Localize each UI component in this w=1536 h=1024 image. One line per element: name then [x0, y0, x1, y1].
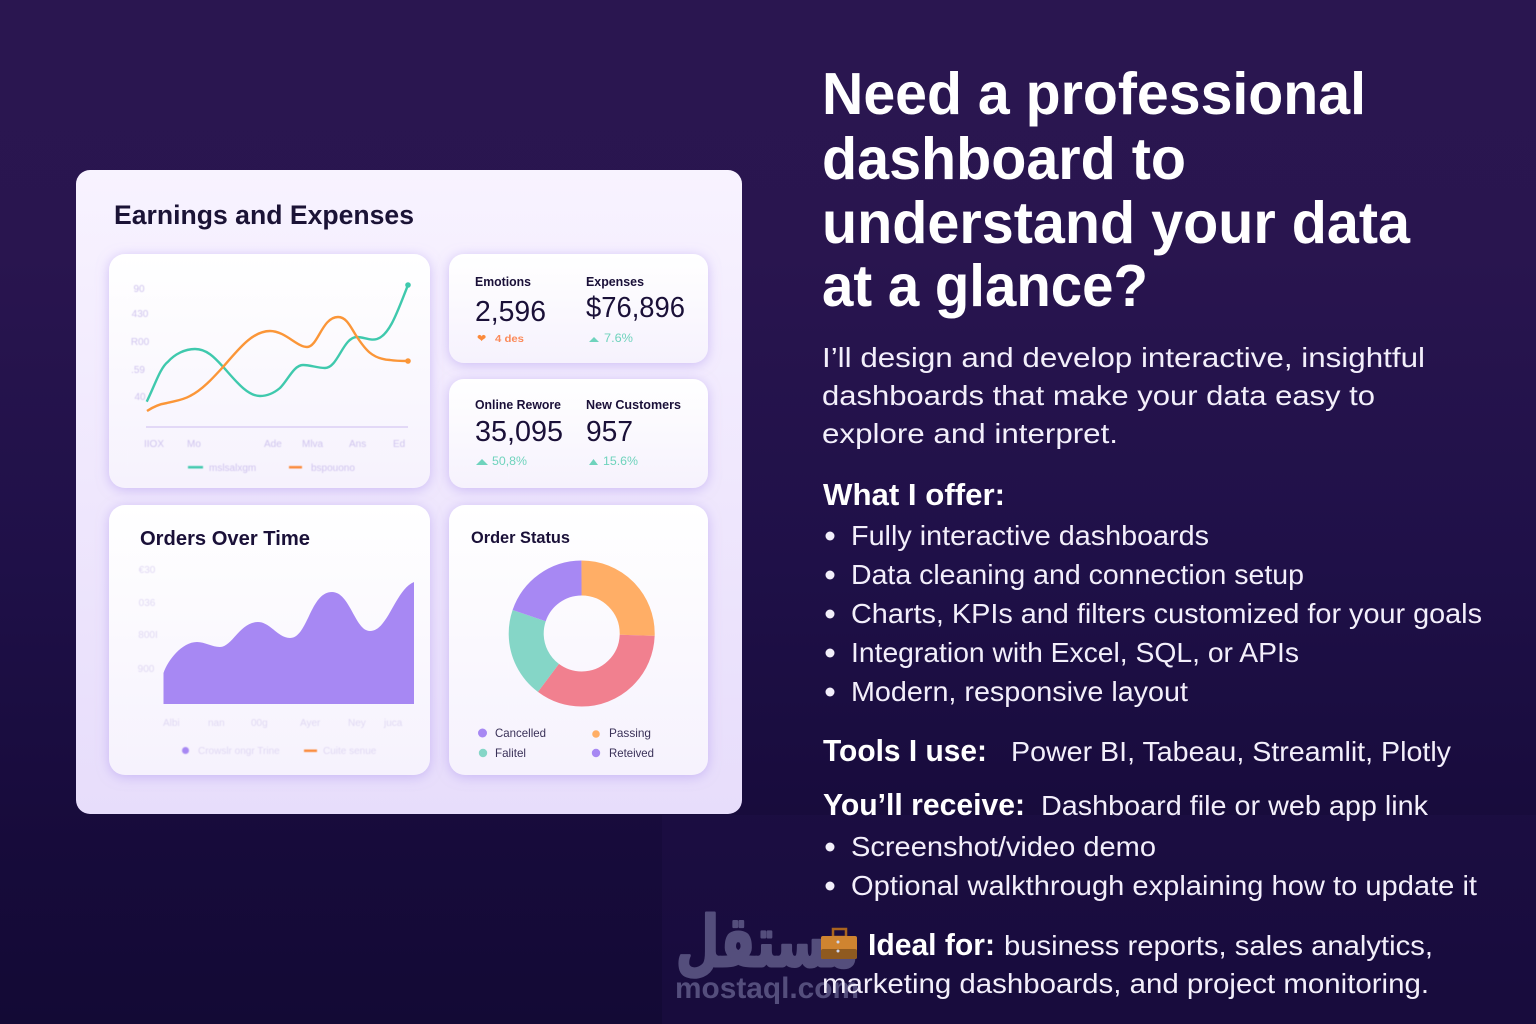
- y axis labels: 90: [133, 284, 145, 295]
- KPI new customers: [586, 398, 681, 468]
- intro paragraph: I’ll design and develop interactive, insightful: [822, 342, 1425, 373]
- KPI emotions: Emotions: [475, 275, 531, 289]
- x axis labels: Ayer: [300, 718, 321, 729]
- ideal for text: business reports, sales analytics,: [1004, 930, 1433, 961]
- watermark: mostaql logo: mostaql.com: [675, 972, 859, 1005]
- heading: what I offer: What I offer:: [823, 477, 1005, 512]
- KPI expenses: 7.6%: [604, 331, 633, 345]
- intro paragraph: explore and interpret.: [822, 418, 1118, 449]
- series: green line: [147, 285, 408, 402]
- legend: Reteived: [609, 746, 654, 760]
- legend: [182, 746, 377, 757]
- y axis labels: R00: [131, 337, 150, 348]
- tools line: Tools I use:: [823, 733, 987, 768]
- offer list: Fully interactive dashboards: [851, 520, 1209, 551]
- x axis labels: Mlva: [302, 439, 324, 450]
- watermark: mostaql logo: مستقل: [676, 903, 858, 981]
- KPI emotions: ❤: [477, 333, 486, 345]
- series: orange line: [147, 317, 408, 411]
- watermark: mostaql logo: [675, 903, 859, 1005]
- icon: briefcase: [821, 929, 857, 959]
- line end dots: [405, 282, 411, 364]
- y axis labels: €30: [139, 565, 156, 576]
- x axis labels: juca: [383, 718, 403, 729]
- offer list: Integration with Excel, SQL, or APIs: [851, 637, 1299, 668]
- axis line: [146, 426, 408, 428]
- receive list: Screenshot/video demo: [851, 831, 1156, 862]
- KPI new customers: 15.6%: [603, 454, 638, 468]
- legend: Falitel: [495, 746, 526, 760]
- KPI emotions: 4 des: [495, 334, 524, 345]
- title: at a glance?: [822, 253, 1148, 319]
- x axis labels: 00g: [251, 718, 268, 729]
- area chart: [164, 582, 414, 704]
- receive line: Dashboard file or web app link: [1041, 790, 1429, 821]
- panel: KPI top: [449, 254, 708, 363]
- y axis labels: [138, 565, 158, 675]
- dashboard heading: Earnings and Expenses: [114, 200, 414, 230]
- panel: orders over time: [109, 505, 430, 775]
- offer list: Data cleaning and connection setup: [851, 559, 1304, 590]
- title: Need a professional: [822, 61, 1366, 127]
- x axis labels: Albi: [163, 718, 180, 729]
- KPI new customers: 957: [586, 416, 633, 448]
- legend: bspouono: [311, 463, 355, 474]
- legend: [188, 463, 355, 474]
- KPI new customers: New Customers: [586, 398, 681, 412]
- intro paragraph: dashboards that make your data easy to: [822, 380, 1375, 411]
- x axis labels: Ney: [348, 718, 366, 729]
- legend: [478, 726, 654, 760]
- KPI expenses: Expenses: [586, 275, 644, 289]
- y axis labels: 800I: [138, 630, 158, 641]
- KPI online: 50,8%: [492, 454, 527, 468]
- panel: line chart: [109, 254, 430, 488]
- y axis labels: 036: [139, 598, 156, 609]
- x axis labels: [163, 718, 403, 729]
- x axis labels: Ans: [349, 439, 366, 450]
- KPI emotions: [475, 275, 546, 345]
- x axis labels: Mo: [187, 439, 201, 450]
- title: dashboard to: [822, 126, 1186, 192]
- offer list: [826, 520, 1482, 707]
- x axis labels: Ade: [264, 439, 282, 450]
- receive list: Optional walkthrough explaining how to update it: [851, 870, 1477, 901]
- ideal for text: marketing dashboards, and project monitoring.: [822, 968, 1429, 999]
- receive line: [823, 787, 1429, 822]
- KPI expenses: [586, 275, 685, 345]
- KPI emotions: 2,596: [475, 296, 546, 328]
- lower backdrop block: [662, 815, 1536, 1024]
- title: understand your data: [822, 190, 1411, 256]
- tools line: [823, 733, 1451, 768]
- title: [822, 61, 1411, 319]
- chart heading: Order Status: [471, 529, 570, 547]
- panel: order status: [449, 505, 708, 775]
- KPI online: Online Rewore: [475, 398, 561, 412]
- legend: Cuite senue: [323, 746, 377, 757]
- x axis labels: Ed: [393, 439, 405, 450]
- KPI online: 35,095: [475, 416, 563, 448]
- intro paragraph: [822, 342, 1425, 449]
- x axis labels: IIOX: [144, 439, 164, 450]
- offer list: Modern, responsive layout: [851, 676, 1188, 707]
- y axis labels: 900: [138, 664, 155, 675]
- legend: mslsalxgm: [209, 463, 256, 474]
- y axis labels: 430: [132, 309, 149, 320]
- offer list: Charts, KPIs and filters customized for your goals: [851, 598, 1482, 629]
- donut chart: [526, 578, 637, 689]
- x axis labels: nan: [208, 718, 225, 729]
- y axis labels: .59: [131, 365, 145, 376]
- panel: KPI bottom: [449, 379, 708, 488]
- KPI expenses: $76,896: [586, 292, 685, 324]
- legend: Cancelled: [495, 726, 546, 740]
- ideal for text: Ideal for:: [868, 927, 995, 962]
- KPI online: [475, 398, 563, 468]
- x axis labels: [144, 439, 405, 450]
- receive list: [826, 831, 1477, 901]
- legend: Passing: [609, 726, 651, 740]
- y axis labels: 40: [134, 392, 146, 403]
- y axis labels: [131, 284, 150, 403]
- receive line: You’ll receive:: [823, 787, 1025, 822]
- dashboard panel: [76, 170, 742, 814]
- ideal for text: [822, 927, 1433, 999]
- chart heading: Orders Over Time: [140, 527, 310, 550]
- legend: Crowslr ongr Trine: [198, 746, 280, 757]
- tools line: Power BI, Tabeau, Streamlit, Plotly: [1011, 736, 1451, 767]
